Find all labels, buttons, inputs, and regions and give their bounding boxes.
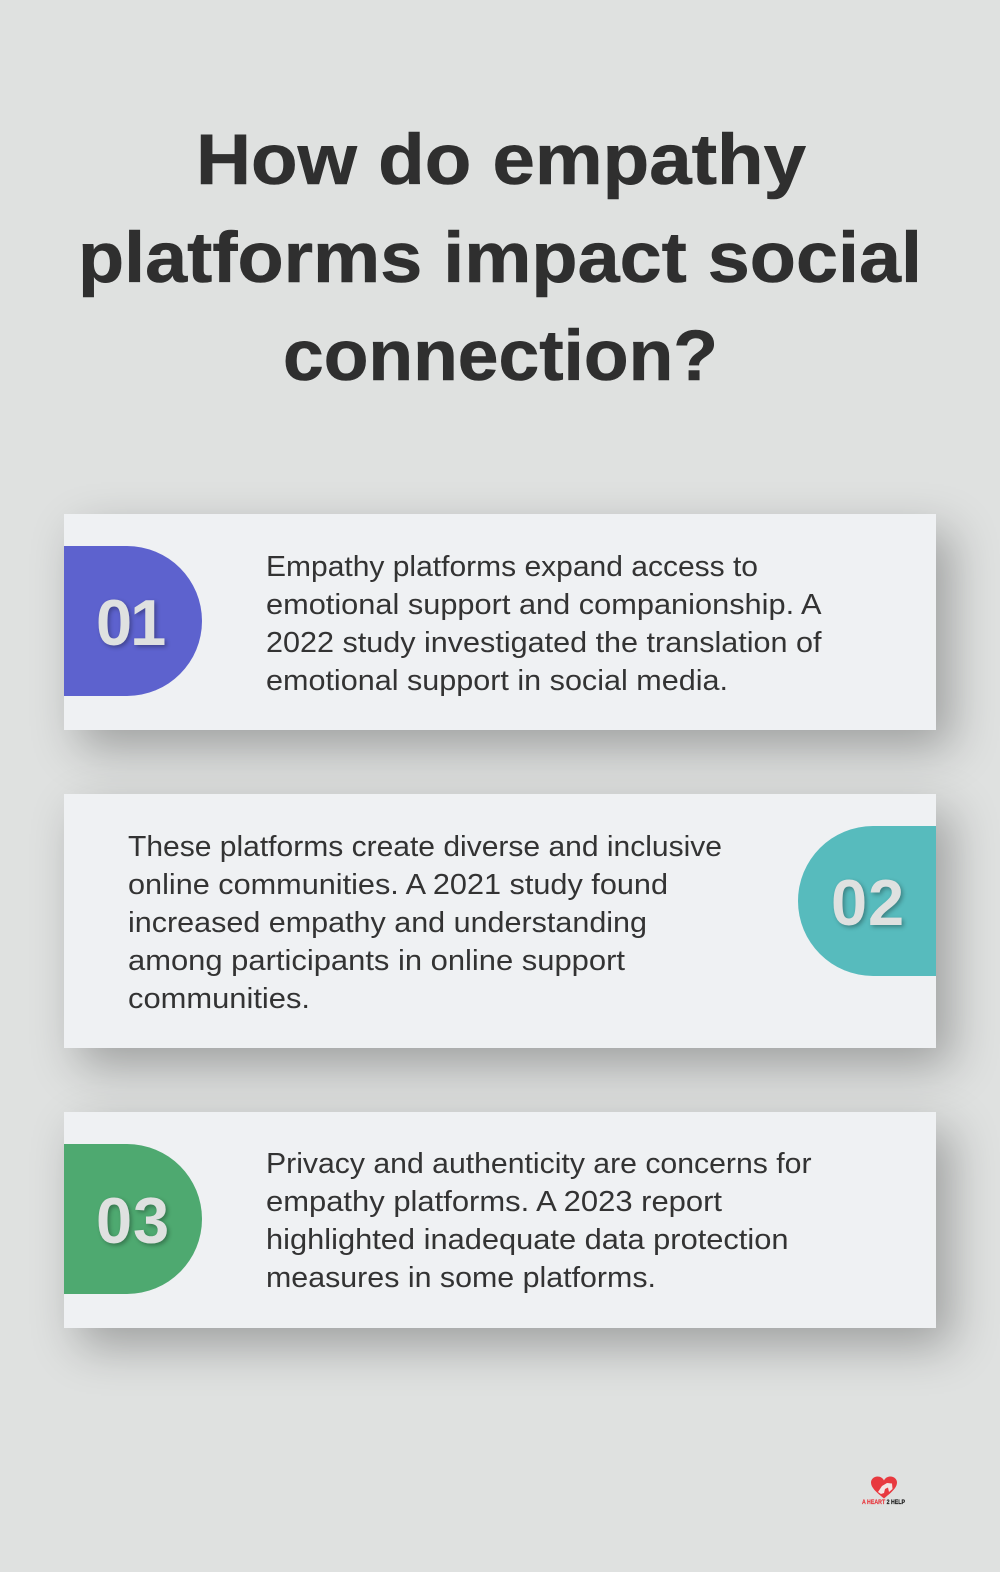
text block: card 03 body: highlighted inadequate data protection	[266, 1224, 788, 1256]
text block: card 01 body: Empathy platforms expand access to	[266, 551, 758, 583]
badge: 02	[798, 826, 936, 976]
text block: card 03 body: Privacy and authenticity are concerns for	[266, 1148, 812, 1180]
text block: card 01 body: emotional support and companionship. A	[266, 589, 822, 621]
panel: card 01	[64, 514, 936, 730]
text block: card 02 body: increased empathy and understanding	[128, 907, 647, 939]
badge: 03	[64, 1144, 202, 1294]
number 02: 02	[831, 866, 905, 939]
text block: card 03 body	[266, 1148, 812, 1294]
icon: heart with hands	[871, 1476, 897, 1498]
text block: card 03 body: empathy platforms. A 2023 report	[266, 1186, 722, 1218]
text block: card 03 body: measures in some platforms.	[266, 1262, 656, 1294]
badge: 01	[64, 546, 202, 696]
panel: card 02	[64, 794, 936, 1048]
text block: card 02 body: These platforms create diverse and inclusive	[128, 831, 722, 863]
title: connection?	[283, 317, 718, 396]
text block: card 01 body: 2022 study investigated the translation of	[266, 627, 822, 659]
number 03: 03	[96, 1184, 170, 1257]
title	[78, 121, 922, 396]
text block: card 02 body: communities.	[128, 983, 310, 1015]
text block: card 01 body	[266, 551, 822, 697]
text block: card 02 body: among participants in online support	[128, 945, 625, 977]
number 01: 01	[96, 586, 164, 659]
title: How do empathy	[196, 121, 807, 200]
text block: card 02 body	[128, 831, 722, 1015]
title: platforms impact social	[78, 219, 922, 298]
logo wordmark: A HEART 2 HELP	[862, 1499, 906, 1506]
panel: card 03	[64, 1112, 936, 1328]
text block: card 01 body: emotional support in social media.	[266, 665, 728, 697]
text block: card 02 body: online communities. A 2021 study found	[128, 869, 668, 901]
